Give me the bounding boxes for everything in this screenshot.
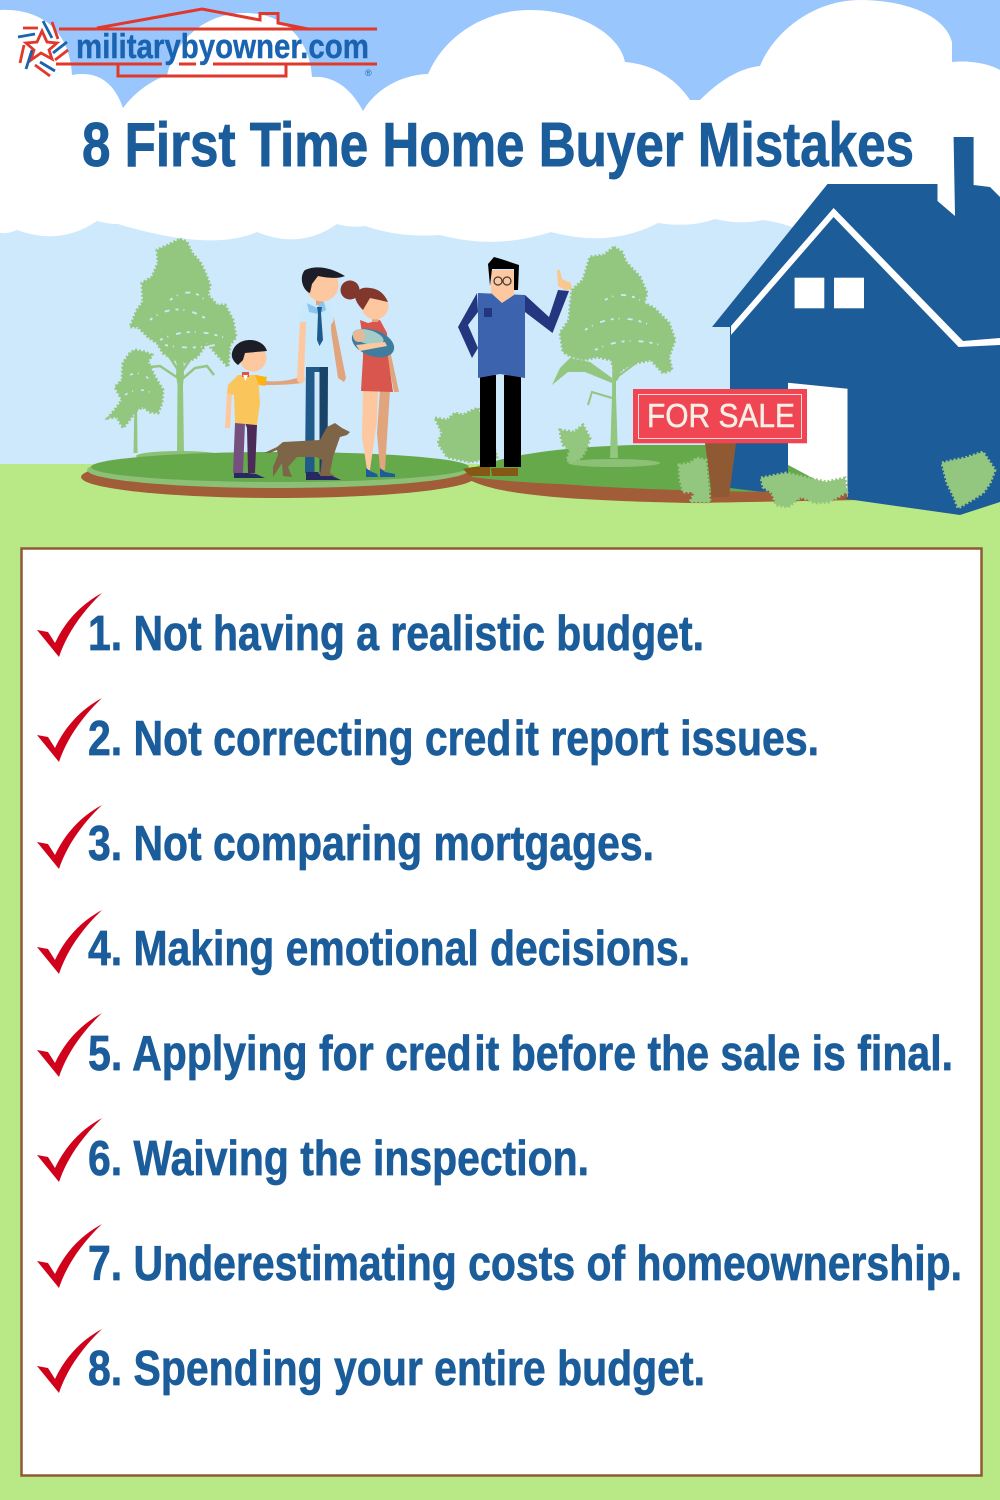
item 4: 4. Making emotional decisions. <box>88 922 690 976</box>
item 1: 1. Not having a realistic budget. <box>88 607 704 661</box>
item 2: 2. Not correcting credit report issues. <box>88 712 819 766</box>
tree: right <box>552 247 675 467</box>
for sale sign <box>633 389 807 443</box>
item 6: 6. Waiving the inspection. <box>88 1132 589 1186</box>
door <box>788 383 848 497</box>
house <box>712 137 1000 515</box>
logo star <box>18 21 68 76</box>
logo wordmark: militarybyowner.com <box>76 28 369 66</box>
roof trim <box>731 208 1000 347</box>
bush behind advisor <box>435 408 497 462</box>
logo <box>18 9 377 78</box>
item 3 <box>37 805 654 871</box>
boy <box>225 340 302 478</box>
father <box>297 267 346 480</box>
sign post <box>705 443 736 497</box>
item 8 <box>37 1329 705 1396</box>
attic windows <box>795 278 864 308</box>
advisor <box>458 257 572 476</box>
mother <box>340 280 399 477</box>
tree: small left <box>108 350 163 453</box>
item 2 <box>37 698 819 766</box>
item 1 <box>37 593 704 661</box>
left garden island <box>81 452 475 498</box>
ground under door <box>788 465 847 497</box>
ground <box>0 464 1000 1500</box>
item 6 <box>37 1118 589 1186</box>
sky background <box>0 0 1000 120</box>
right garden island <box>466 445 860 503</box>
clouds <box>0 0 1000 242</box>
tree: large left <box>130 239 236 461</box>
item 8: 8. Spending your entire budget. <box>88 1342 705 1396</box>
item 3: 3. Not comparing mortgages. <box>88 817 654 871</box>
bush by tree <box>560 425 590 463</box>
dog <box>264 423 350 477</box>
for sale sign: FOR SALE <box>647 397 795 434</box>
list panel <box>22 548 982 1476</box>
item 4 <box>37 910 690 976</box>
bushes in front <box>679 452 995 508</box>
lower sky <box>0 200 1000 480</box>
logo: ® <box>365 68 372 78</box>
